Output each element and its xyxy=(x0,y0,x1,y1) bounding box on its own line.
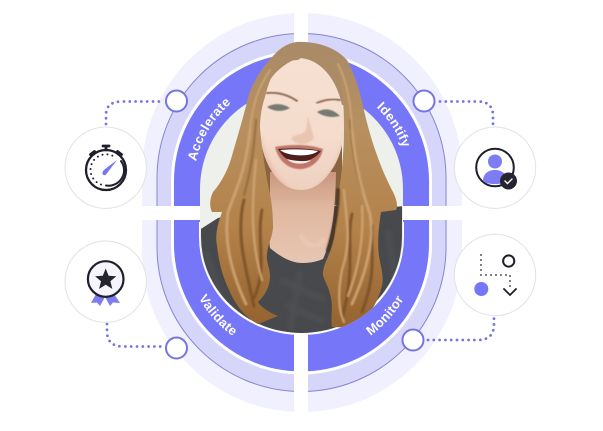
sweater texture xyxy=(205,230,395,330)
card circle xyxy=(454,234,536,316)
label: Accelerate: Accelerate xyxy=(188,99,230,162)
neck xyxy=(270,172,336,263)
sweater and neck xyxy=(201,146,402,333)
node: Identify xyxy=(414,90,434,112)
band: outer pale xyxy=(142,13,462,412)
icon card: award xyxy=(65,241,146,322)
ring marker xyxy=(503,255,514,267)
icon card: person xyxy=(454,127,536,208)
mouth opening xyxy=(278,148,321,162)
person ring xyxy=(476,149,514,186)
sweater xyxy=(201,206,402,333)
band: middle lavender xyxy=(157,34,446,392)
node: Monitor xyxy=(402,330,424,350)
path dots xyxy=(481,255,510,288)
label: Monitor: Monitor xyxy=(366,296,402,336)
ring gap: vertical xyxy=(294,0,308,431)
connector: Validate xyxy=(107,324,163,346)
face xyxy=(259,58,344,190)
medal xyxy=(88,261,123,297)
card circle xyxy=(65,241,146,322)
cheek shading xyxy=(262,140,342,186)
hair: right side xyxy=(300,42,397,328)
hair behind the neck xyxy=(262,146,342,205)
right eyebrow xyxy=(317,99,340,103)
node: Accelerate xyxy=(166,90,187,112)
mouth xyxy=(275,145,323,169)
label: Identify: Identify xyxy=(377,102,410,146)
neck highlight xyxy=(300,234,324,241)
band: inner purple xyxy=(174,54,429,372)
check badge xyxy=(500,172,517,190)
stopwatch case xyxy=(86,150,126,190)
infographic: four stage ring around portrait xyxy=(64,13,536,412)
person body xyxy=(483,170,507,184)
connector: Identify xyxy=(440,102,493,124)
hair: dark under strands xyxy=(241,120,372,318)
upper teeth xyxy=(280,149,318,155)
hair: left side xyxy=(210,42,301,324)
label: Validate: Validate xyxy=(200,293,236,335)
hair: light strands xyxy=(227,64,371,322)
nose shading xyxy=(291,116,314,144)
ring: layered bands xyxy=(130,0,475,431)
right eye xyxy=(317,109,340,117)
connector: Monitor xyxy=(428,318,494,340)
hair: top cap xyxy=(270,42,347,105)
check mark xyxy=(505,179,512,184)
face details xyxy=(262,92,342,186)
left eyebrow xyxy=(267,93,297,101)
stopwatch needle xyxy=(102,160,117,175)
card circle xyxy=(454,127,536,208)
band: white separator xyxy=(171,51,432,374)
node: Validate xyxy=(166,338,187,358)
card circle xyxy=(65,127,146,208)
left eye xyxy=(267,104,290,111)
icon card: monitor path xyxy=(454,234,536,316)
chevron xyxy=(504,289,516,295)
lower teeth xyxy=(287,159,311,164)
connector: Accelerate xyxy=(106,102,164,124)
stopwatch inner arc xyxy=(106,161,124,186)
white photo rim xyxy=(199,222,404,336)
ribbons xyxy=(91,294,120,306)
portrait photo xyxy=(196,42,406,345)
icon card: stopwatch xyxy=(65,127,146,208)
star xyxy=(95,268,116,289)
purple marker xyxy=(474,282,488,296)
stopwatch crown xyxy=(90,146,122,154)
person head xyxy=(488,154,502,168)
stopwatch tick dots xyxy=(90,154,113,184)
photo backdrop xyxy=(200,104,403,319)
ring gap: horizontal xyxy=(130,206,475,220)
